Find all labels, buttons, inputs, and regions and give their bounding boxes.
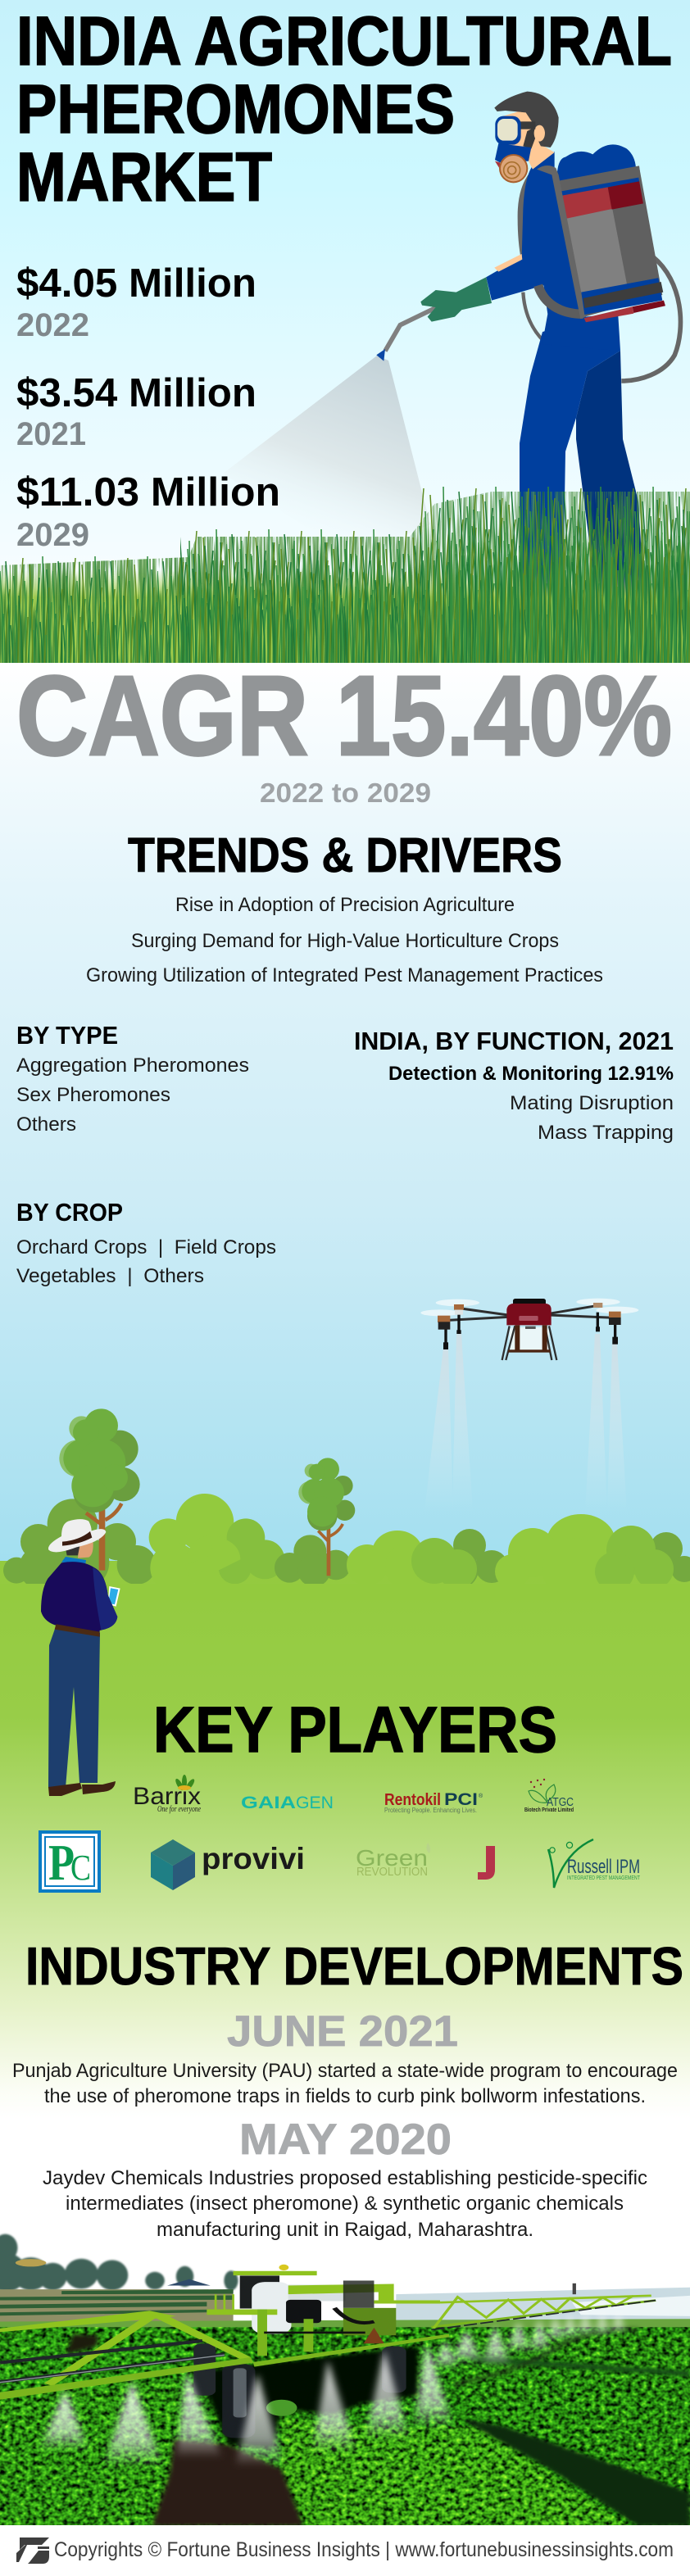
logo: Pc bbox=[39, 1830, 101, 1893]
logo: Barrix bbox=[133, 1775, 201, 1814]
grass field bbox=[0, 487, 690, 663]
logo: GAIAGEN: GEN bbox=[296, 1794, 334, 1812]
logo: Green Revolution bbox=[356, 1843, 430, 1879]
logo: Russell IPM: INTEGRATED PEST MANAGEMENT bbox=[567, 1875, 641, 1881]
heading: by type: BY TYPE bbox=[16, 1021, 118, 1050]
olive bushes bbox=[439, 1529, 690, 1589]
distant landscape bbox=[0, 2234, 690, 2343]
logo: Barrix: Barrix bbox=[133, 1783, 201, 1810]
drone spray plumes bbox=[424, 1334, 627, 1512]
lime bush two bbox=[347, 1531, 434, 1591]
list: function options: Mating Disruption bbox=[510, 1092, 674, 1114]
title: MARKET bbox=[16, 138, 272, 215]
list: type options: Aggregation Pheromones bbox=[16, 1054, 249, 1077]
farmer trousers bbox=[48, 1629, 100, 1788]
list: crop options: Orchard Crops | Field Crops bbox=[16, 1236, 276, 1259]
stat: 2029 value: $11.03 Million bbox=[16, 470, 280, 515]
date: May 2020: MAY 2020 bbox=[239, 2116, 452, 2164]
grass blades right bbox=[418, 487, 690, 663]
logo: GAIAGEN bbox=[241, 1794, 334, 1812]
olive bush left bbox=[3, 1499, 157, 1590]
highlight: detection share: Detection & Monitoring 12.91% bbox=[388, 1063, 674, 1085]
panel: by type bbox=[16, 1021, 249, 1136]
list: function options bbox=[510, 1092, 674, 1144]
hoses behind worker bbox=[521, 167, 680, 381]
logo: GAIAGEN: GAIA bbox=[241, 1794, 296, 1812]
title: PHEROMONES bbox=[16, 70, 455, 147]
right bushes bbox=[347, 1514, 690, 1600]
illustration: worker spraying with backpack bbox=[376, 92, 680, 598]
trends list: Growing Utilization of Integrated Pest Management Practices bbox=[86, 964, 603, 986]
tea rows bbox=[0, 2327, 690, 2526]
background: green ground gradient bbox=[0, 1561, 690, 2118]
left olive bushes, tree and farmer backdrop bbox=[3, 1408, 355, 1592]
logo: provivi bbox=[151, 1839, 305, 1890]
development text: PAU bbox=[12, 2060, 678, 2107]
lime bush centre bbox=[149, 1494, 240, 1592]
farmer shoes bbox=[48, 1781, 116, 1796]
development text: Jaydev: intermediates (insect pheromone) & synthetic organic chemicals bbox=[66, 2193, 624, 2215]
spray boom bbox=[0, 2283, 656, 2400]
logo: Rentokil PCI: PCI bbox=[444, 1790, 478, 1809]
logo: J bbox=[478, 1846, 495, 1880]
stat: 2021 value: $3.54 Million bbox=[16, 371, 256, 415]
list: type options bbox=[16, 1054, 249, 1136]
list: crop options bbox=[16, 1236, 276, 1287]
grass blades middle second layer bbox=[180, 541, 690, 663]
stat: 2029 year: 2029 bbox=[16, 517, 89, 553]
photo: boom sprayer over tea field bbox=[0, 2234, 690, 2526]
footer bar bbox=[0, 2525, 690, 2576]
white band under grass bbox=[0, 663, 690, 664]
logo: ATGC: ATGC bbox=[547, 1795, 574, 1809]
logo: Green Revolution: Green bbox=[356, 1845, 428, 1871]
machine body bbox=[207, 2265, 440, 2356]
CAGR period: 2022 to 2029 bbox=[260, 778, 431, 808]
big tree bbox=[59, 1408, 140, 1571]
footer logo bbox=[16, 2537, 49, 2564]
machine underside and wheels bbox=[193, 2343, 418, 2447]
background: sky gradient middle bbox=[0, 663, 690, 1564]
development text: Jaydev: manufacturing unit in Raigad, Maharashtra. bbox=[157, 2219, 533, 2241]
logo: Rentokil PCI: ® bbox=[479, 1793, 483, 1799]
farmer upper body bbox=[41, 1519, 120, 1637]
list: type options: Sex Pheromones bbox=[16, 1084, 170, 1106]
development text: Jaydev: Jaydev Chemicals Industries proposed establishing pesticide-specific bbox=[43, 2167, 647, 2189]
lime bush three bbox=[495, 1514, 615, 1600]
list: crop options: Vegetables | Others bbox=[16, 1265, 204, 1287]
trends list bbox=[86, 894, 603, 986]
green glove bbox=[420, 277, 492, 322]
grass blades right second layer bbox=[459, 497, 690, 663]
logo: Pc: P bbox=[48, 1835, 75, 1891]
development text: Jaydev bbox=[43, 2167, 647, 2241]
spray cone from nozzle bbox=[223, 356, 430, 557]
heading: trends and drivers: TRENDS & DRIVERS bbox=[128, 828, 562, 882]
heading: by function: INDIA, BY FUNCTION, 2021 bbox=[354, 1027, 674, 1055]
market value statistics bbox=[16, 261, 280, 553]
logo: Pc: C bbox=[70, 1848, 91, 1888]
head with goggles and respirator bbox=[494, 92, 559, 183]
stat: 2022 value: $4.05 Million bbox=[16, 261, 256, 306]
stat: 2022 year: 2022 bbox=[16, 307, 89, 343]
grass blades left bbox=[0, 556, 188, 663]
logo: Rentokil PCI bbox=[384, 1790, 483, 1814]
trends list: Surging Demand for High-Value Horticulture Crops bbox=[131, 930, 559, 952]
logo: ATGC bbox=[524, 1779, 574, 1813]
logo: Russell IPM bbox=[548, 1839, 641, 1888]
logo: Russell IPM: Russell IPM bbox=[567, 1856, 640, 1878]
date: June 2021: JUNE 2021 bbox=[227, 2007, 458, 2056]
grass ground bbox=[0, 569, 690, 663]
stat: 2021 year: 2021 bbox=[16, 416, 86, 452]
background: sky gradient top bbox=[0, 0, 690, 590]
olive bush right bbox=[275, 1535, 351, 1587]
spray mist cones bbox=[39, 2312, 626, 2467]
list: type options: Others bbox=[16, 1113, 76, 1136]
sprayer lance and nozzle bbox=[376, 306, 440, 361]
logo: ATGC: Biotech Private Limited bbox=[524, 1807, 574, 1813]
worker torso and tank bbox=[486, 144, 665, 351]
illustration: farmer with tablet bbox=[41, 1519, 120, 1796]
logo: Rentokil PCI: Rentokil bbox=[384, 1791, 441, 1809]
logo: Barrix: One for everyone bbox=[157, 1805, 201, 1814]
heading: key players: KEY PLAYERS bbox=[153, 1693, 557, 1766]
panel: India by function bbox=[354, 1027, 674, 1144]
logo: Rentokil PCI: Protecting People. Enhancing Lives. bbox=[384, 1807, 477, 1814]
grass blades middle bbox=[180, 529, 426, 663]
small tree bbox=[298, 1458, 355, 1576]
panel: by crop bbox=[16, 1198, 276, 1287]
trends list: Rise in Adoption of Precision Agriculture bbox=[175, 894, 515, 916]
development text: PAU: the use of pheromone traps in fields to curb pink bollworm infestations. bbox=[44, 2085, 646, 2107]
title bbox=[16, 2, 672, 215]
worker legs bbox=[520, 311, 644, 598]
icon: spraying drone bbox=[420, 1299, 638, 1360]
development text: PAU: Punjab Agriculture University (PAU) started a state-wide program to encourage bbox=[12, 2060, 678, 2082]
logo: provivi: provivi bbox=[202, 1842, 305, 1875]
list: function options: Mass Trapping bbox=[538, 1122, 674, 1144]
logo: Green Revolution: REVOLUTION bbox=[356, 1865, 428, 1879]
tea row shadows and soil bbox=[66, 2329, 690, 2526]
ground strip over bush bases bbox=[0, 1584, 690, 1600]
heading: by crop: BY CROP bbox=[16, 1198, 123, 1227]
grass streak mass bbox=[0, 492, 690, 663]
